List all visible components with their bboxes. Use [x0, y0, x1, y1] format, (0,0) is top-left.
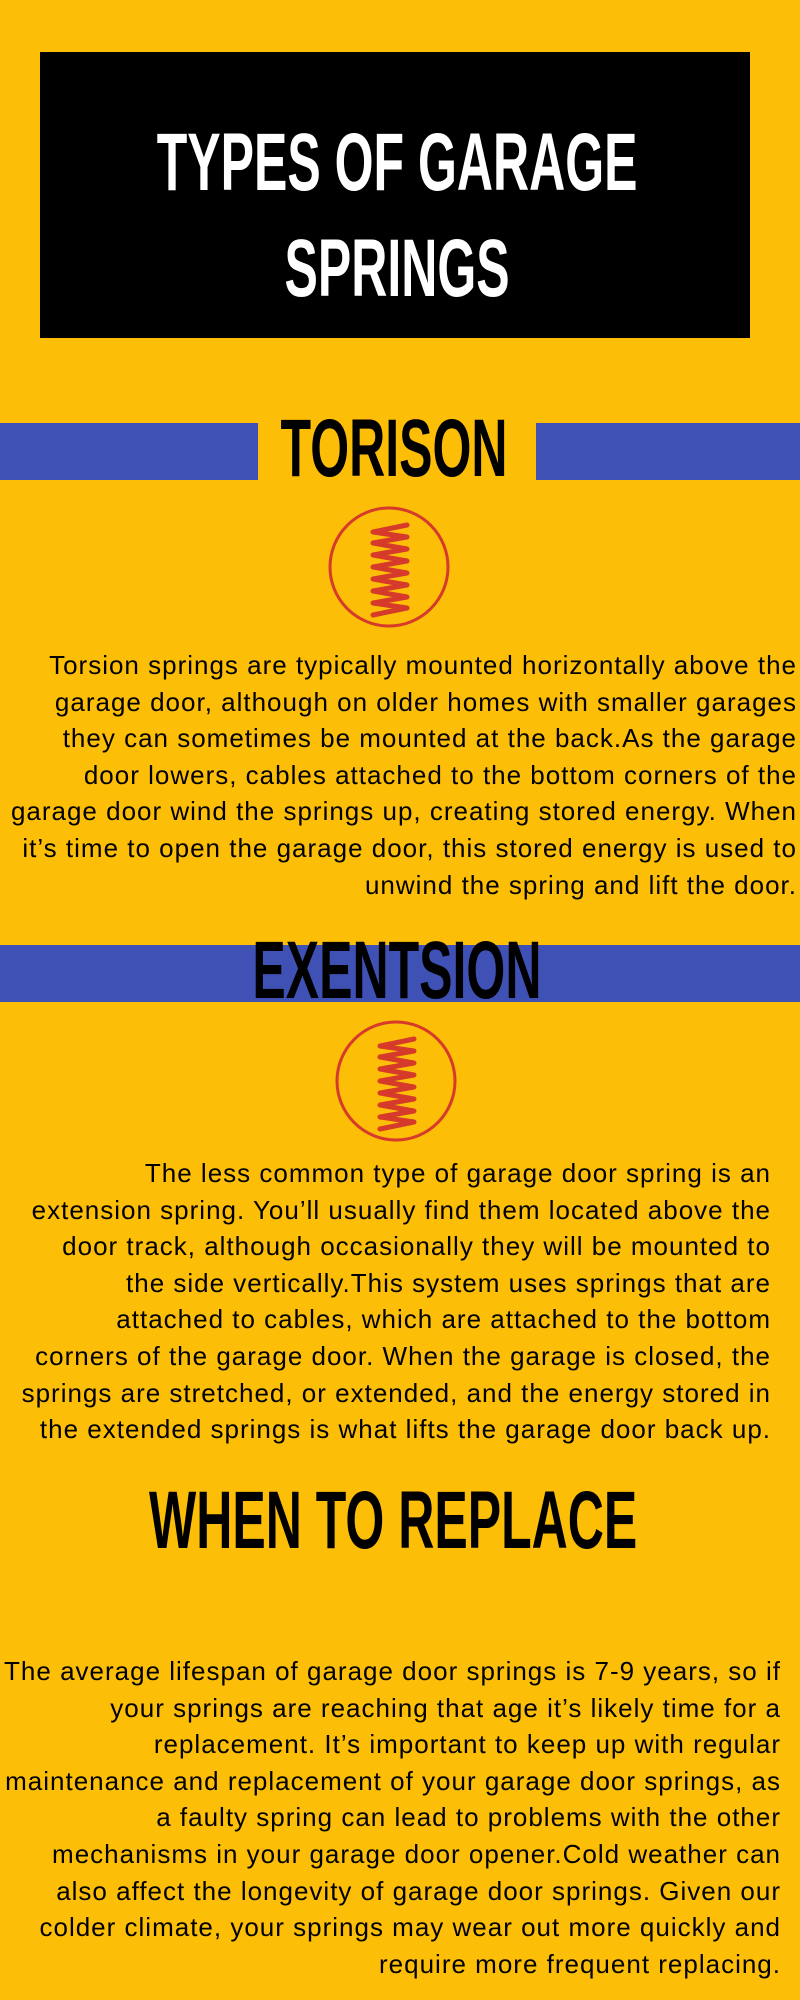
text: extension description: The less common type of garage door spring is an	[145, 1158, 771, 1188]
text: replacement description: your springs are reaching that age it’s likely time for a	[110, 1693, 781, 1723]
text: torsion description: garage door, although on older homes with smaller garages	[55, 687, 797, 717]
band: torsion	[0, 423, 800, 480]
text: extension description: springs are stretched, or extended, and the energy stored in	[22, 1378, 771, 1408]
band: extension	[0, 945, 800, 1002]
text: torsion description: Torsion springs are typically mounted horizontally above the	[49, 650, 797, 680]
title box	[40, 52, 750, 338]
text: extension description: the side vertically.This system uses springs that are	[126, 1268, 771, 1298]
title text	[157, 117, 637, 314]
title text: SPRINGS	[284, 223, 510, 314]
text: replacement description	[4, 1656, 781, 1979]
icon: spring 1	[328, 506, 450, 628]
text: replacement description: The average lifespan of garage door springs is 7-9 years, so if	[4, 1656, 781, 1686]
text: torsion description: it’s time to open the garage door, this stored energy is used to	[22, 833, 797, 863]
text: replacement description: mechanisms in your garage door opener.Cold weather can	[52, 1839, 781, 1869]
text: extension description	[22, 1158, 771, 1444]
text: extension description: door track, although occasionally they will be mounted to	[62, 1231, 771, 1261]
text: extension description: the extended springs is what lifts the garage door back up.	[40, 1414, 771, 1444]
heading: when to replace: WHEN TO REPLACE	[149, 1475, 637, 1566]
text: extension description: attached to cables, which are attached to the bottom	[116, 1304, 771, 1334]
text: torsion description: door lowers, cables attached to the bottom corners of the	[84, 760, 797, 790]
text: replacement description: replacement. It’s important to keep up with regular	[154, 1729, 781, 1759]
text: torsion description: they can sometimes be mounted at the back.As the garage	[63, 723, 797, 753]
text: torsion description	[11, 650, 797, 900]
text: replacement description: also affect the longevity of garage door springs. Given our	[56, 1876, 781, 1906]
heading: torison: TORISON	[281, 403, 507, 494]
text: replacement description: colder climate, your springs may wear out more quickly and	[39, 1912, 781, 1942]
text: torsion description: garage door wind the springs up, creating stored energy. When	[11, 796, 797, 826]
text: replacement description: maintenance and replacement of your garage door springs, as	[5, 1766, 781, 1796]
text: extension description: corners of the garage door. When the garage is closed, the	[35, 1341, 771, 1371]
text: torsion description: unwind the spring and lift the door.	[365, 870, 797, 900]
text: replacement description: a faulty spring can lead to problems with the other	[156, 1802, 781, 1832]
title text: TYPES OF GARAGE	[157, 117, 637, 208]
icon: spring 2	[336, 1020, 456, 1142]
heading: exentsion: EXENTSION	[252, 925, 542, 1016]
text: replacement description: require more frequent replacing.	[379, 1949, 781, 1979]
text: extension description: extension spring. You’ll usually find them located above the	[32, 1195, 771, 1225]
